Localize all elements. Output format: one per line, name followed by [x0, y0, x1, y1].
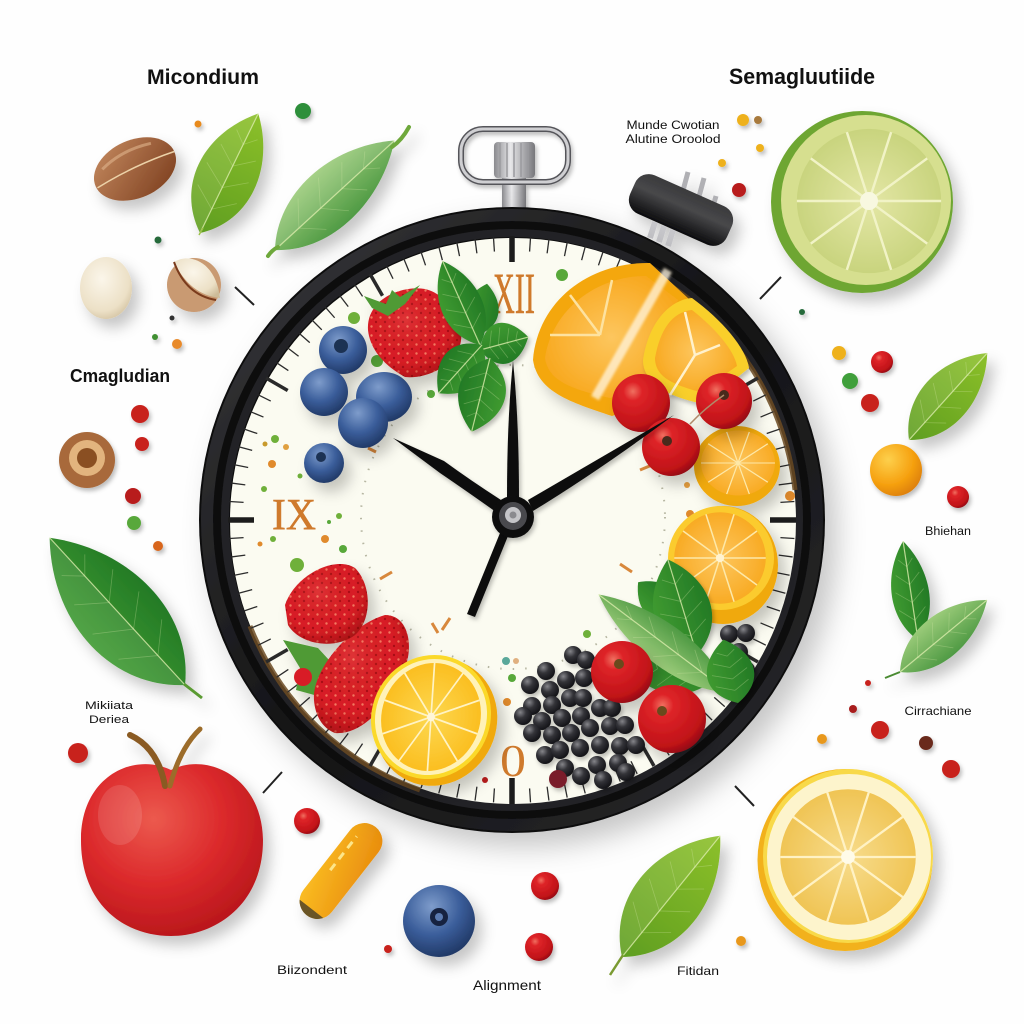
- label: Mikiiata Deriea: Mikiiata: [85, 700, 134, 712]
- label: Munde Cwotian: Munde Cwotian: [626, 120, 720, 132]
- clock hand: tail: [467, 533, 508, 617]
- heading: Micondium: Micondium: [147, 66, 259, 89]
- food: citrus slice right: [694, 426, 780, 506]
- icon: pair of leaves: [884, 538, 1000, 688]
- numeral 0: 0: [500, 735, 526, 786]
- label: Munde Cwotian: Alutine Oroolod: [626, 134, 720, 146]
- label: Fitidan: Fitidan: [677, 964, 719, 978]
- icon: leaf top left: [172, 100, 285, 246]
- clock face: [230, 238, 796, 804]
- clock: [199, 207, 825, 833]
- food: cherries: [612, 373, 752, 476]
- food: blueberries: [300, 326, 412, 483]
- food: top strawberry: [364, 285, 461, 377]
- food: lemon slice bottom: [348, 633, 520, 808]
- food: lower strawberries: [283, 564, 409, 733]
- label: Bhiehan: Bhiehan: [925, 526, 971, 538]
- label: Cmagludian: Cmagludian: [70, 366, 170, 386]
- food: lemon wedge: [643, 298, 749, 404]
- icon: split nut: [167, 258, 221, 312]
- icon: lime slice: [771, 111, 953, 293]
- icon: blueberry: [403, 885, 475, 957]
- food: basil bottom: [586, 551, 760, 709]
- clock hand: minute: [507, 361, 519, 498]
- icon: long leaf top: [254, 118, 414, 271]
- icon: lemon slice large: [758, 769, 933, 951]
- brown inner rim: [250, 268, 795, 790]
- icon: leaf right: [890, 336, 1005, 456]
- food: orange wedge: [533, 263, 690, 416]
- icon: ring nut: [59, 432, 115, 488]
- label: Mikiiata Deriea: [85, 700, 134, 726]
- confetti dots on face: [258, 269, 795, 783]
- numeral IX: IX: [272, 490, 316, 539]
- icon: almond: [84, 125, 186, 213]
- icon: capsule: [292, 816, 390, 926]
- label: Mikiiata Deriea: Deriea: [89, 714, 130, 726]
- label: Alignment: Alignment: [473, 977, 541, 993]
- clock hand: hour: [393, 438, 501, 512]
- scattered dots: [68, 103, 969, 961]
- icon: stopwatch pusher: [624, 169, 738, 251]
- icon: cream nut: [80, 257, 132, 319]
- food: tomatoes: [591, 641, 706, 753]
- clock case: [199, 207, 825, 833]
- icon: large leaf left: [18, 511, 215, 714]
- clock hand: long right: [528, 415, 674, 511]
- icon: orange fruit: [870, 444, 922, 496]
- food: basil top: [423, 253, 533, 438]
- icon: stopwatch crown: [461, 129, 568, 210]
- marker strokes around the clock: [235, 277, 781, 806]
- label: Cirrachiane: Cirrachiane: [904, 704, 972, 718]
- icon: green leaf bottom: [594, 813, 746, 978]
- numeral XII: XII: [493, 261, 535, 326]
- heading: Semagluutiide: Semagluutiide: [729, 64, 875, 89]
- minute ticks: [205, 213, 819, 827]
- inner dashed ring: [361, 365, 665, 669]
- clock pivot: [492, 496, 534, 538]
- label: Munde Cwotian: [626, 120, 720, 146]
- food: citrus slice lower right: [668, 506, 778, 624]
- label: Biizondent: Biizondent: [277, 963, 348, 977]
- icon: apple: [81, 729, 263, 936]
- food: black berries: [514, 624, 755, 789]
